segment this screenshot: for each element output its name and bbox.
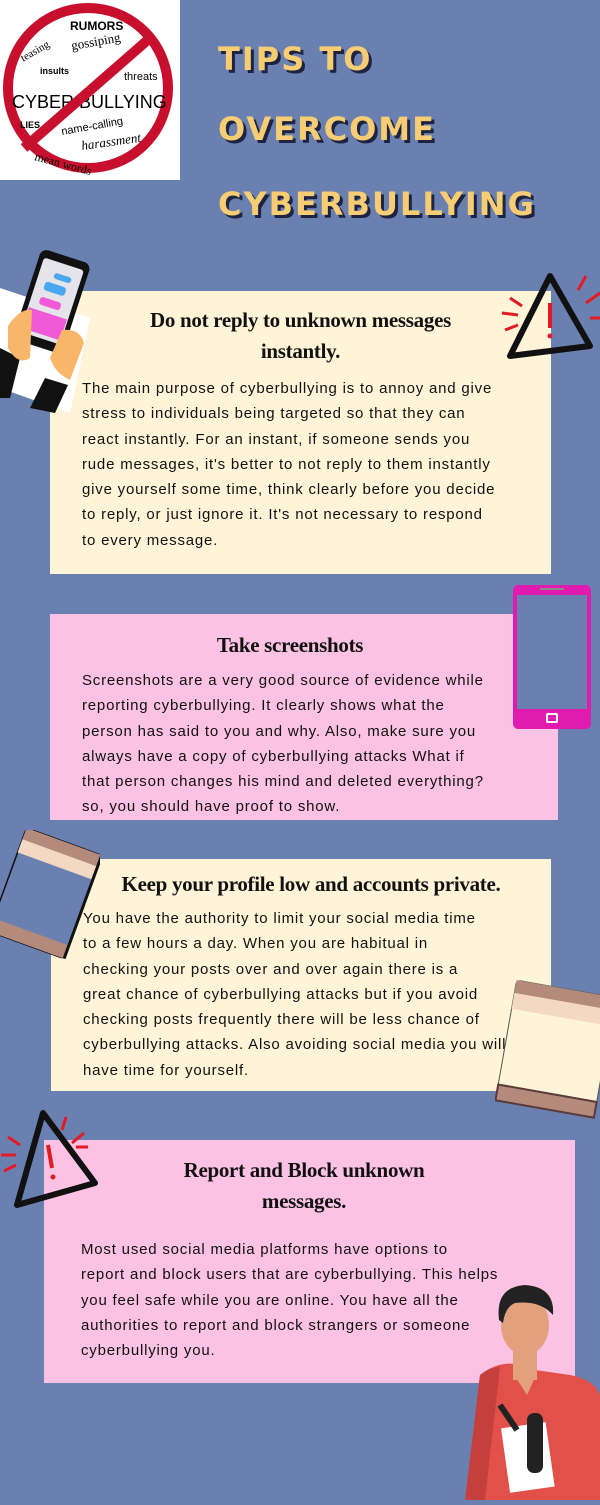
text block [82,672,484,815]
text block: person has said to you and why. Also, make sure you [82,723,476,740]
icon: hands with phone [0,250,90,413]
title [218,40,536,223]
icon: magenta phone [513,585,591,729]
text block: report and block users that are cyberbullying. This helps [81,1266,498,1283]
logo: no cyberbullying: teasing [19,38,52,64]
text block: The main purpose of cyberbullying is to annoy and give [82,380,492,397]
text block: so, you should have proof to show. [82,798,340,815]
logo: no cyberbullying: harassment [80,130,142,153]
heading: instantly. [261,339,340,363]
heading [150,308,451,363]
icon: warning sign bottom left [1,1110,98,1208]
logo: no cyberbullying: name-calling [60,115,124,138]
text block: cyberbullying attacks. Also avoiding social media you will [83,1036,506,1053]
heading: Do not reply to unknown messages [150,308,451,332]
panel: keep profile low [51,859,551,1091]
text block: authorities to report and block strangers or someone [81,1317,470,1334]
panel: take screenshots [50,614,558,820]
panel: do not reply [50,291,551,574]
text block [83,910,506,1079]
text block: to reply, or just ignore it. It's not necessary to respond [82,506,483,523]
text block: to every message. [82,532,218,549]
text block: Most used social media platforms have options to [81,1241,448,1258]
text block: you feel safe while you are online. You have all the [81,1292,459,1309]
heading: Keep your profile low and accounts private. [122,872,500,896]
title: OVERCOME [218,110,436,148]
text block [81,1241,498,1359]
text block: cyberbullying you. [81,1342,215,1359]
heading [184,1158,424,1213]
text block: react instantly. For an instant, if someone sends you [82,431,470,448]
text block: great chance of cyberbullying attacks but if you avoid [83,986,478,1003]
logo: no cyberbullying: gossiping [70,29,122,53]
panel: report and block [44,1140,575,1383]
text block: to a few hours a day. When you are habitual in [83,935,428,952]
logo: no cyberbullying: LIES [20,120,40,130]
text block: that person changes his mind and deleted everything? [82,773,484,790]
text block: checking posts frequently there will be less chance of [83,1011,480,1028]
text block: give yourself some time, think clearly before you decide [82,481,495,498]
text block: have time for yourself. [83,1062,249,1079]
title: CYBERBULLYING [218,185,536,223]
text block: rude messages, it's better to not reply to them instantly [82,456,491,473]
heading: messages. [262,1189,346,1213]
heading: Report and Block unknown [184,1158,424,1182]
logo: no cyberbullying [0,0,180,180]
icon: person with microphone [465,1285,600,1500]
text block: Screenshots are a very good source of evidence while [82,672,484,689]
text block: You have the authority to limit your social media time [83,910,476,927]
logo: no cyberbullying: CYBER BULLYING [12,92,167,112]
text block: always have a copy of cyberbullying attacks What if [82,748,465,765]
logo: no cyberbullying: threats [124,71,158,83]
logo: no cyberbullying: mean words [33,149,93,178]
heading: Take screenshots [217,633,363,657]
text block: reporting cyberbullying. It clearly shows what the [82,697,445,714]
title: TIPS TO [218,40,372,78]
icon: social feed phone left [0,830,100,960]
text block: checking your posts over and over again there is a [83,961,458,978]
text block: stress to individuals being targeted so that they can [82,405,465,422]
icon: social feed phone right [495,980,600,1119]
text block [82,380,495,549]
icon: warning sign top right [502,273,600,359]
logo: no cyberbullying: RUMORS [70,19,123,33]
logo: no cyberbullying: insults [40,66,69,76]
